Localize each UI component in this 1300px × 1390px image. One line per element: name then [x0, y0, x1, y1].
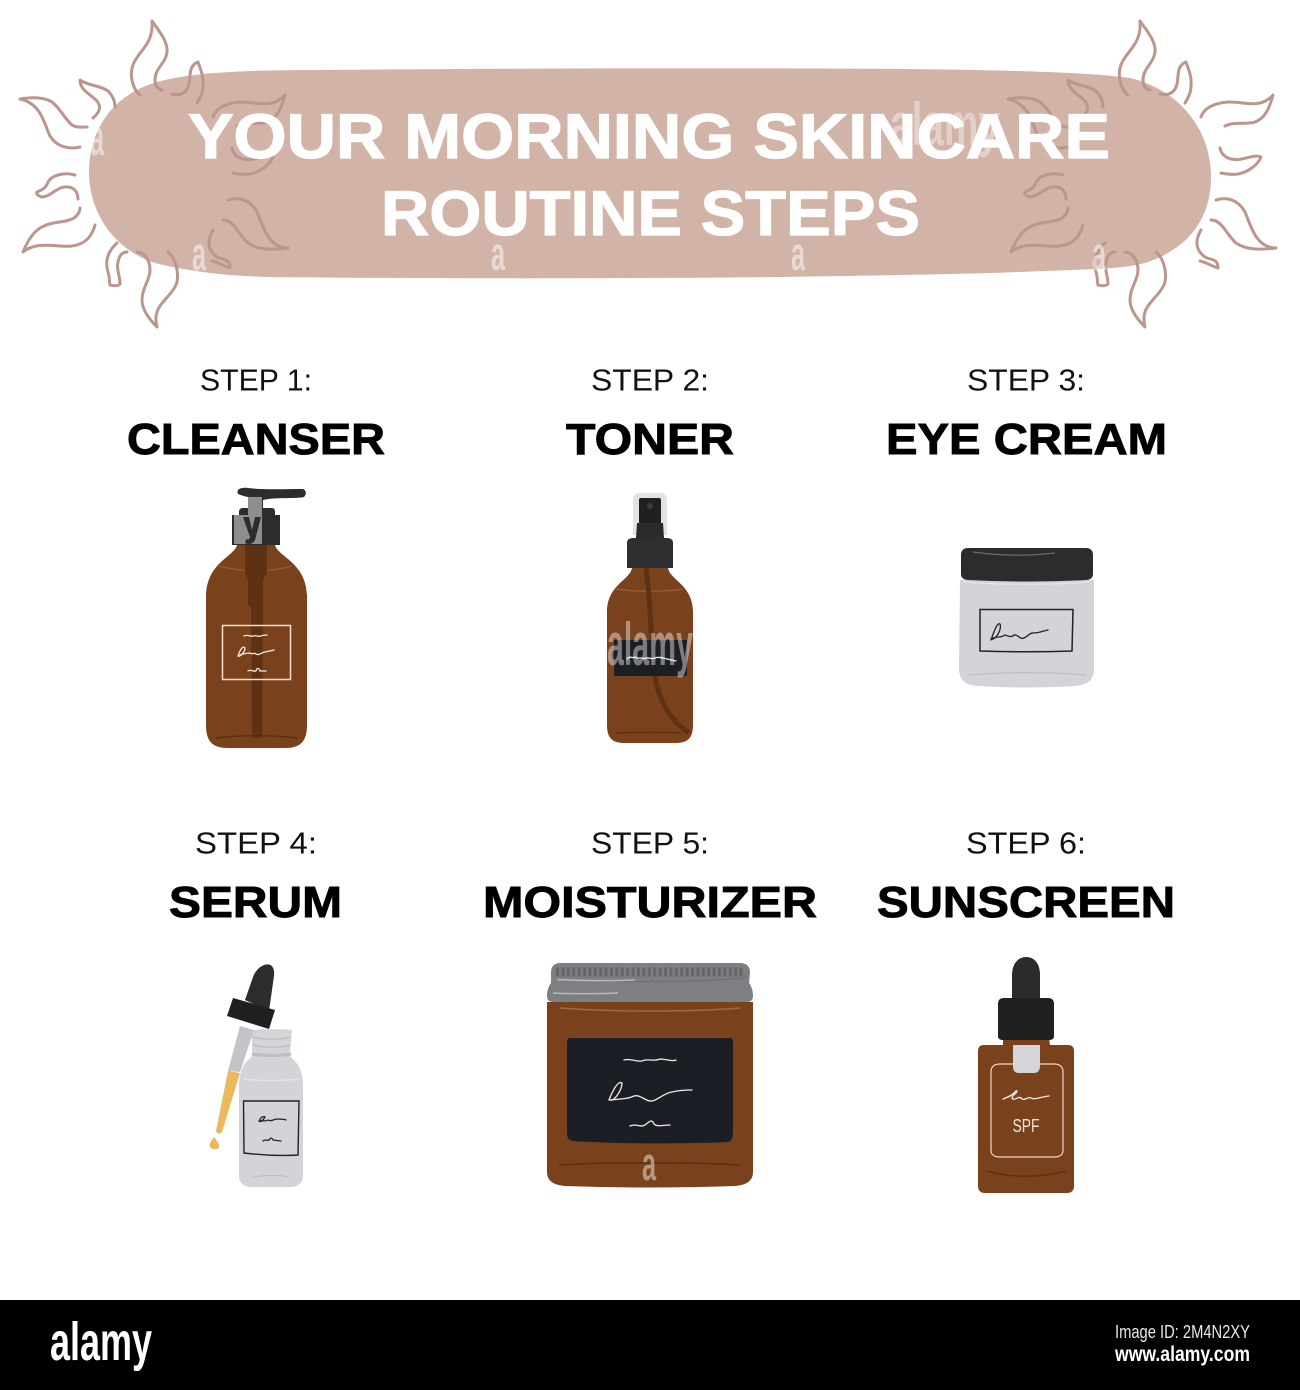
- heading: step 1 cleanser: CLEANSER: [127, 415, 385, 464]
- watermark fragments: a: [192, 227, 206, 280]
- heading: step 2 toner: [566, 362, 734, 464]
- heading: step 2 toner: STEP 2:: [591, 362, 709, 398]
- icon: left sun rays: [20, 21, 288, 327]
- heading: step 6 sunscreen: SUNSCREEN: [877, 878, 1175, 927]
- icon: sunscreen dropper bottle: [978, 957, 1074, 1193]
- icon: eye cream jar: [959, 548, 1094, 688]
- footer bar: [0, 1300, 1300, 1390]
- heading: step 1 cleanser: STEP 1:: [200, 362, 312, 398]
- heading: step 6 sunscreen: [877, 826, 1175, 927]
- heading: step 3 eye cream: EYE CREAM: [886, 415, 1167, 464]
- title: YOUR MORNING SKINCARE: [188, 102, 1110, 172]
- heading: step 4 serum: SERUM: [169, 878, 342, 927]
- title: [188, 102, 1110, 249]
- icon: cleanser pump bottle: [206, 488, 307, 748]
- icon: toner spray bottle: [607, 493, 693, 743]
- footer image id and url: [1114, 1322, 1250, 1366]
- label text: SPF: SPF: [1012, 1116, 1040, 1136]
- heading: step 5 moisturizer: [483, 826, 817, 927]
- watermark fragments: a: [791, 227, 805, 280]
- watermark fragments: a: [90, 109, 105, 167]
- heading: step 1 cleanser: [127, 362, 385, 464]
- heading: step 5 moisturizer: STEP 5:: [591, 826, 709, 860]
- heading: step 4 serum: STEP 4:: [195, 826, 317, 860]
- icon: serum dropper bottle: [209, 964, 303, 1187]
- watermark fragments: alamy: [607, 611, 693, 678]
- heading: step 3 eye cream: STEP 3:: [967, 362, 1085, 398]
- heading: step 4 serum: [169, 826, 342, 927]
- watermark fragments: [90, 91, 1106, 1190]
- title: ROUTINE STEPS: [381, 179, 920, 249]
- footer image id and url: www.alamy.com: [1114, 1343, 1250, 1366]
- watermark fragments: a: [491, 227, 505, 280]
- footer logo: alamy: [50, 1312, 152, 1372]
- title banner: [89, 68, 1211, 278]
- icon: right sun rays: [1008, 21, 1276, 327]
- heading: step 6 sunscreen: STEP 6:: [966, 826, 1086, 860]
- watermark fragments: a: [1092, 227, 1106, 280]
- watermark fragments: a: [642, 1137, 656, 1190]
- icon: moisturizer jar: [547, 963, 753, 1188]
- watermark fragments: alamy: [890, 91, 1000, 158]
- heading: step 3 eye cream: [886, 362, 1167, 464]
- heading: step 2 toner: TONER: [566, 415, 734, 464]
- heading: step 5 moisturizer: MOISTURIZER: [483, 878, 817, 927]
- footer image id and url: Image ID: 2M4N2XY: [1115, 1322, 1250, 1342]
